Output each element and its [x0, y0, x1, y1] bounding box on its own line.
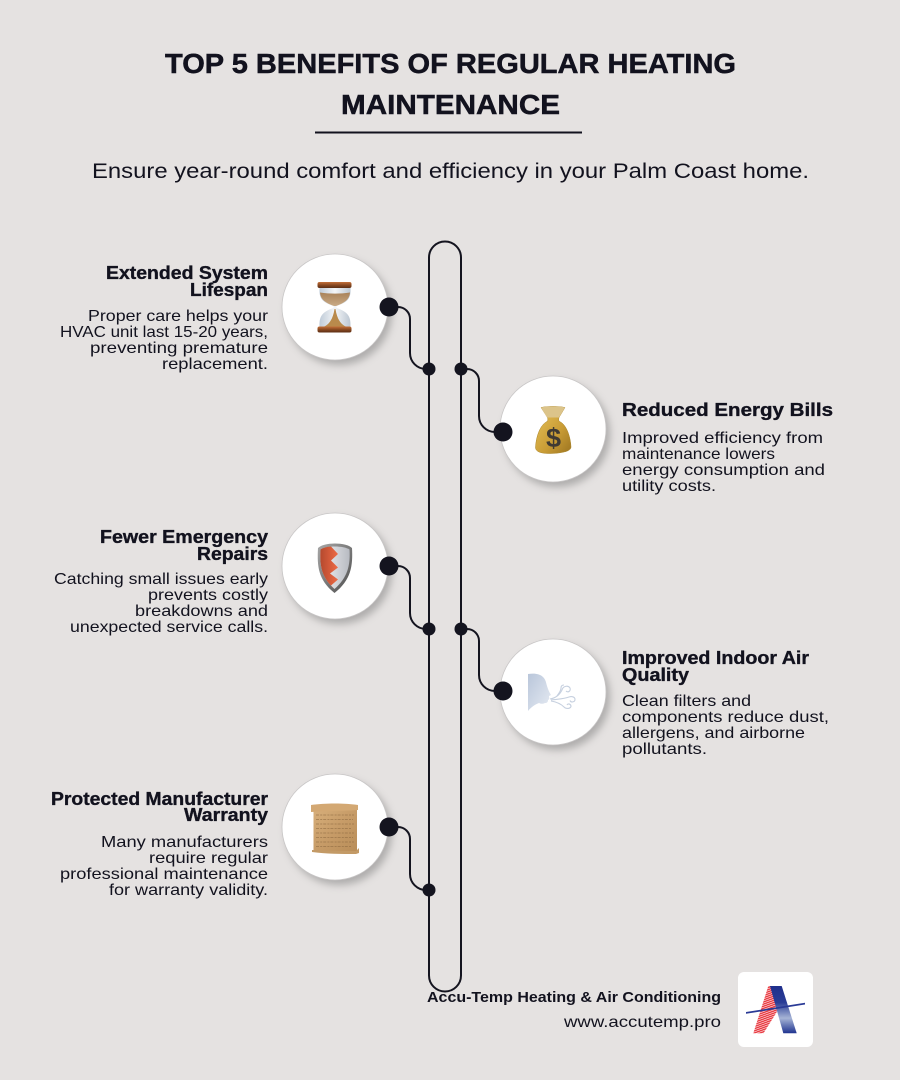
text: reduced energy bills [622, 400, 833, 495]
connector: lifespan [380, 298, 436, 376]
icon: parchment scroll [282, 774, 392, 885]
text: protected manufacturer warranty: Many manufacturers [101, 834, 268, 851]
text: improved indoor air quality: allergens, and airborne [622, 725, 805, 742]
text: reduced energy bills: Reduced Energy Bills [622, 400, 833, 420]
panel: reduced energy bills [454, 362, 833, 495]
title underline [315, 132, 582, 134]
text: fewer emergency repairs: Repairs [197, 544, 268, 564]
text: improved indoor air quality: components reduce dust, [622, 709, 829, 726]
text: reduced energy bills: maintenance lowers [622, 446, 775, 463]
text: protected manufacturer warranty: professional maintenance [60, 866, 268, 883]
panel: improved indoor air quality [454, 622, 829, 758]
connector: warranty [380, 818, 436, 896]
text: fewer emergency repairs: breakdowns and [135, 603, 268, 620]
text: improved indoor air quality: Clean filters and [622, 693, 751, 710]
logo [738, 972, 813, 1047]
text: fewer emergency repairs [54, 527, 268, 636]
connector: air quality [454, 622, 512, 700]
footer website: www.accutemp.pro [563, 1014, 721, 1031]
icon: hourglass [282, 254, 392, 365]
panel: extended system lifespan [60, 254, 436, 376]
text: extended system lifespan: Proper care helps your [88, 308, 269, 325]
central timeline pill [429, 242, 461, 992]
text: reduced energy bills: utility costs. [622, 478, 716, 495]
text: fewer emergency repairs: prevents costly [148, 587, 268, 604]
footer company name: Accu-Temp Heating & Air Conditioning [427, 989, 721, 1006]
icon: money bag: $ [546, 423, 561, 453]
text: improved indoor air quality: Improved Indoor Air [622, 648, 809, 668]
text: protected manufacturer warranty [51, 789, 269, 899]
text: reduced energy bills: Improved efficiency from [622, 430, 823, 447]
text: improved indoor air quality: Quality [622, 665, 689, 685]
text: reduced energy bills: energy consumption and [622, 462, 825, 479]
subtitle: Ensure year-round comfort and efficiency in your Palm Coast home. [92, 160, 809, 183]
text: protected manufacturer warranty: for warranty validity. [109, 882, 268, 899]
text: protected manufacturer warranty: require regular [149, 850, 269, 867]
text: improved indoor air quality: pollutants. [622, 741, 707, 758]
panel: protected manufacturer warranty [51, 774, 436, 899]
connector: energy bills [454, 362, 512, 442]
text: protected manufacturer warranty: Protected Manufacturer [51, 789, 268, 809]
text: extended system lifespan: preventing premature [90, 340, 268, 357]
icon: money bag [500, 376, 610, 487]
title: MAINTENANCE [341, 89, 560, 120]
panel: fewer emergency repairs [54, 513, 436, 636]
text: protected manufacturer warranty: Warranty [184, 805, 268, 825]
icon: shield [282, 513, 392, 624]
text: extended system lifespan [60, 263, 269, 373]
text: extended system lifespan: HVAC unit last 15-20 years, [60, 324, 268, 341]
icon: blowing face [500, 639, 610, 750]
text: fewer emergency repairs: Catching small issues early [54, 571, 268, 588]
text: extended system lifespan: Extended System [106, 263, 268, 283]
text: extended system lifespan: Lifespan [190, 280, 268, 300]
connector: emergency repairs [380, 556, 436, 636]
text: fewer emergency repairs: Fewer Emergency [100, 527, 268, 547]
title: TOP 5 BENEFITS OF REGULAR HEATING [165, 48, 736, 79]
title [165, 48, 736, 120]
text: improved indoor air quality [622, 648, 829, 758]
text: extended system lifespan: replacement. [162, 356, 268, 373]
text: fewer emergency repairs: unexpected service calls. [70, 619, 268, 636]
